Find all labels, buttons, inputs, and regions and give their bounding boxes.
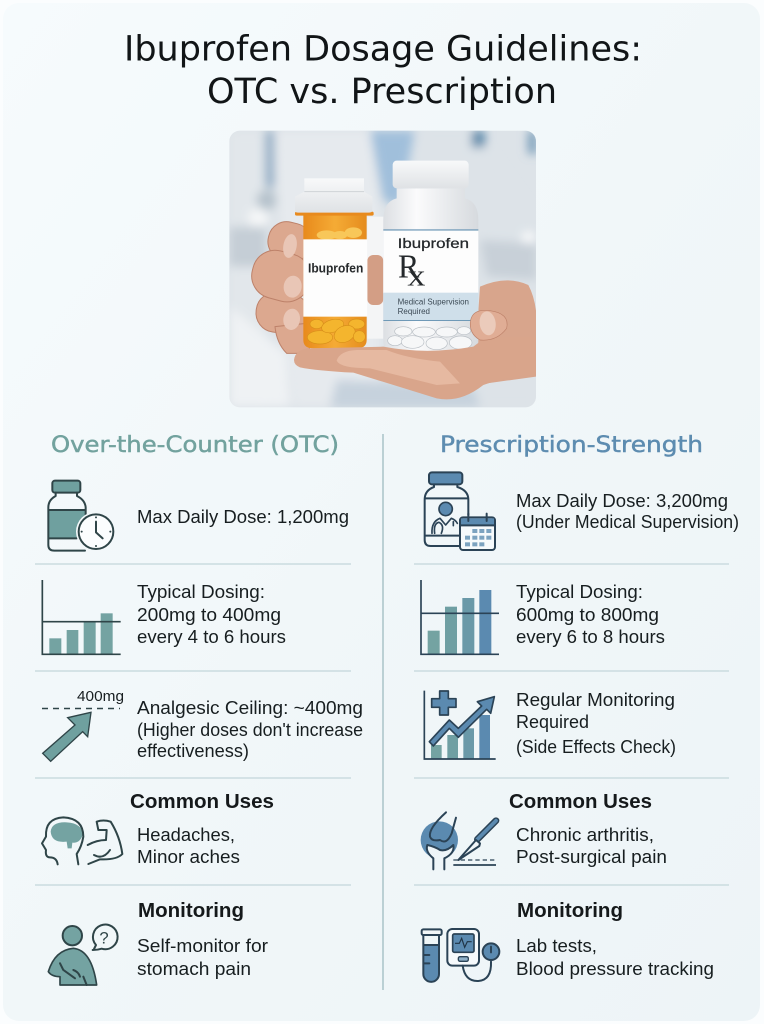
text: OTC uses: Headaches, (137, 824, 235, 845)
palm and thumbs (294, 310, 508, 400)
right hand back (478, 280, 536, 384)
text: typical dosing (516, 581, 665, 647)
heading: monitoring: Monitoring (138, 899, 244, 922)
heading: common uses: Common Uses (130, 790, 274, 813)
heading: prescription: Prescription-Strength (440, 433, 703, 458)
text: max daily dose: Max Daily Dose: 3,200mg (516, 490, 728, 511)
text: typical dosing: every 6 to 8 hours (516, 626, 665, 647)
text: max daily dose: (Under Medical Supervision) (516, 511, 739, 532)
chart: typical dosing bars (42, 580, 121, 654)
gap behind bottles (367, 217, 383, 339)
text: typical dosing: 600mg to 800mg (516, 604, 659, 625)
icon: monitoring chart with medical cross (424, 691, 496, 759)
heading: monitoring: Monitoring (517, 899, 623, 922)
text: typical dosing (137, 581, 286, 647)
icon: arrow reaching 400mg ceiling (42, 689, 124, 761)
text: OTC monitoring: Self-monitor for (137, 935, 268, 956)
nails (283, 234, 302, 330)
text: analgesic ceiling (137, 697, 363, 761)
panel: over-the-counter (35, 433, 363, 985)
text: typical dosing: Typical Dosing: (516, 581, 643, 602)
icon: person with stomach pain (48, 925, 118, 985)
text: regular monitoring: (Side Effects Check) (516, 736, 676, 757)
text: prescription uses: Post-surgical pain (516, 846, 667, 867)
text: regular monitoring: Required (516, 711, 589, 732)
text: prescription monitoring (516, 935, 714, 979)
white prescription bottle: Ibuprofen (398, 235, 469, 251)
white prescription bottle: x (407, 259, 425, 293)
text: analgesic ceiling: Analgesic Ceiling: ~400mg (137, 697, 363, 718)
icon: bottle with clock (48, 481, 116, 552)
text: regular monitoring: Regular Monitoring (516, 689, 675, 710)
text: OTC monitoring (137, 935, 268, 979)
text: max daily dose: Max Daily Dose: 1,200mg (137, 506, 349, 527)
text: prescription uses: Chronic arthritis, (516, 824, 654, 845)
heading: OTC: Over-the-Counter (OTC) (51, 433, 339, 458)
text: max daily dose (516, 490, 739, 532)
title: OTC vs. Prescription (207, 72, 557, 112)
icon: head and flexed arm (42, 817, 122, 864)
text: OTC monitoring: stomach pain (137, 958, 251, 979)
left hand fingers behind bottle (251, 221, 310, 354)
white prescription bottle: Required (398, 307, 430, 316)
text: prescription monitoring: Blood pressure tracking (516, 958, 714, 979)
white prescription bottle: R (398, 249, 420, 286)
orange bottle: Ibuprofen (308, 260, 363, 275)
title (124, 30, 642, 112)
icon: test tube and blood pressure monitor (422, 929, 499, 982)
photo: doctor's hands holding OTC and prescription bottles (229, 131, 537, 407)
title: Ibuprofen Dosage Guidelines: (124, 30, 642, 70)
icon: arrow reaching 400mg ceiling: 400mg (77, 689, 124, 705)
text: typical dosing: Typical Dosing: (137, 581, 265, 602)
white prescription bottle (383, 161, 478, 352)
panel: prescription-strength (414, 433, 739, 982)
text: analgesic ceiling: effectiveness) (137, 740, 249, 761)
text: prescription uses (516, 824, 667, 867)
text: prescription monitoring: Lab tests, (516, 935, 597, 956)
text: analgesic ceiling: (Higher doses don't increase (137, 719, 363, 740)
chart: typical dosing bars (421, 580, 499, 654)
text: regular monitoring (516, 689, 676, 757)
white prescription bottle: Medical Supervision (398, 298, 469, 307)
text: typical dosing: every 4 to 6 hours (137, 626, 286, 647)
text: typical dosing: 200mg to 400mg (137, 604, 281, 625)
icon: knee joint and scalpel (421, 812, 497, 869)
icon: person with stomach pain: ? (99, 928, 109, 947)
heading: common uses: Common Uses (509, 790, 652, 813)
orange bottle (295, 178, 374, 348)
text: OTC uses: Minor aches (137, 846, 240, 867)
text: OTC uses (137, 824, 240, 867)
vertical column divider (382, 434, 384, 990)
icon: bottle with doctor and calendar (425, 472, 495, 550)
